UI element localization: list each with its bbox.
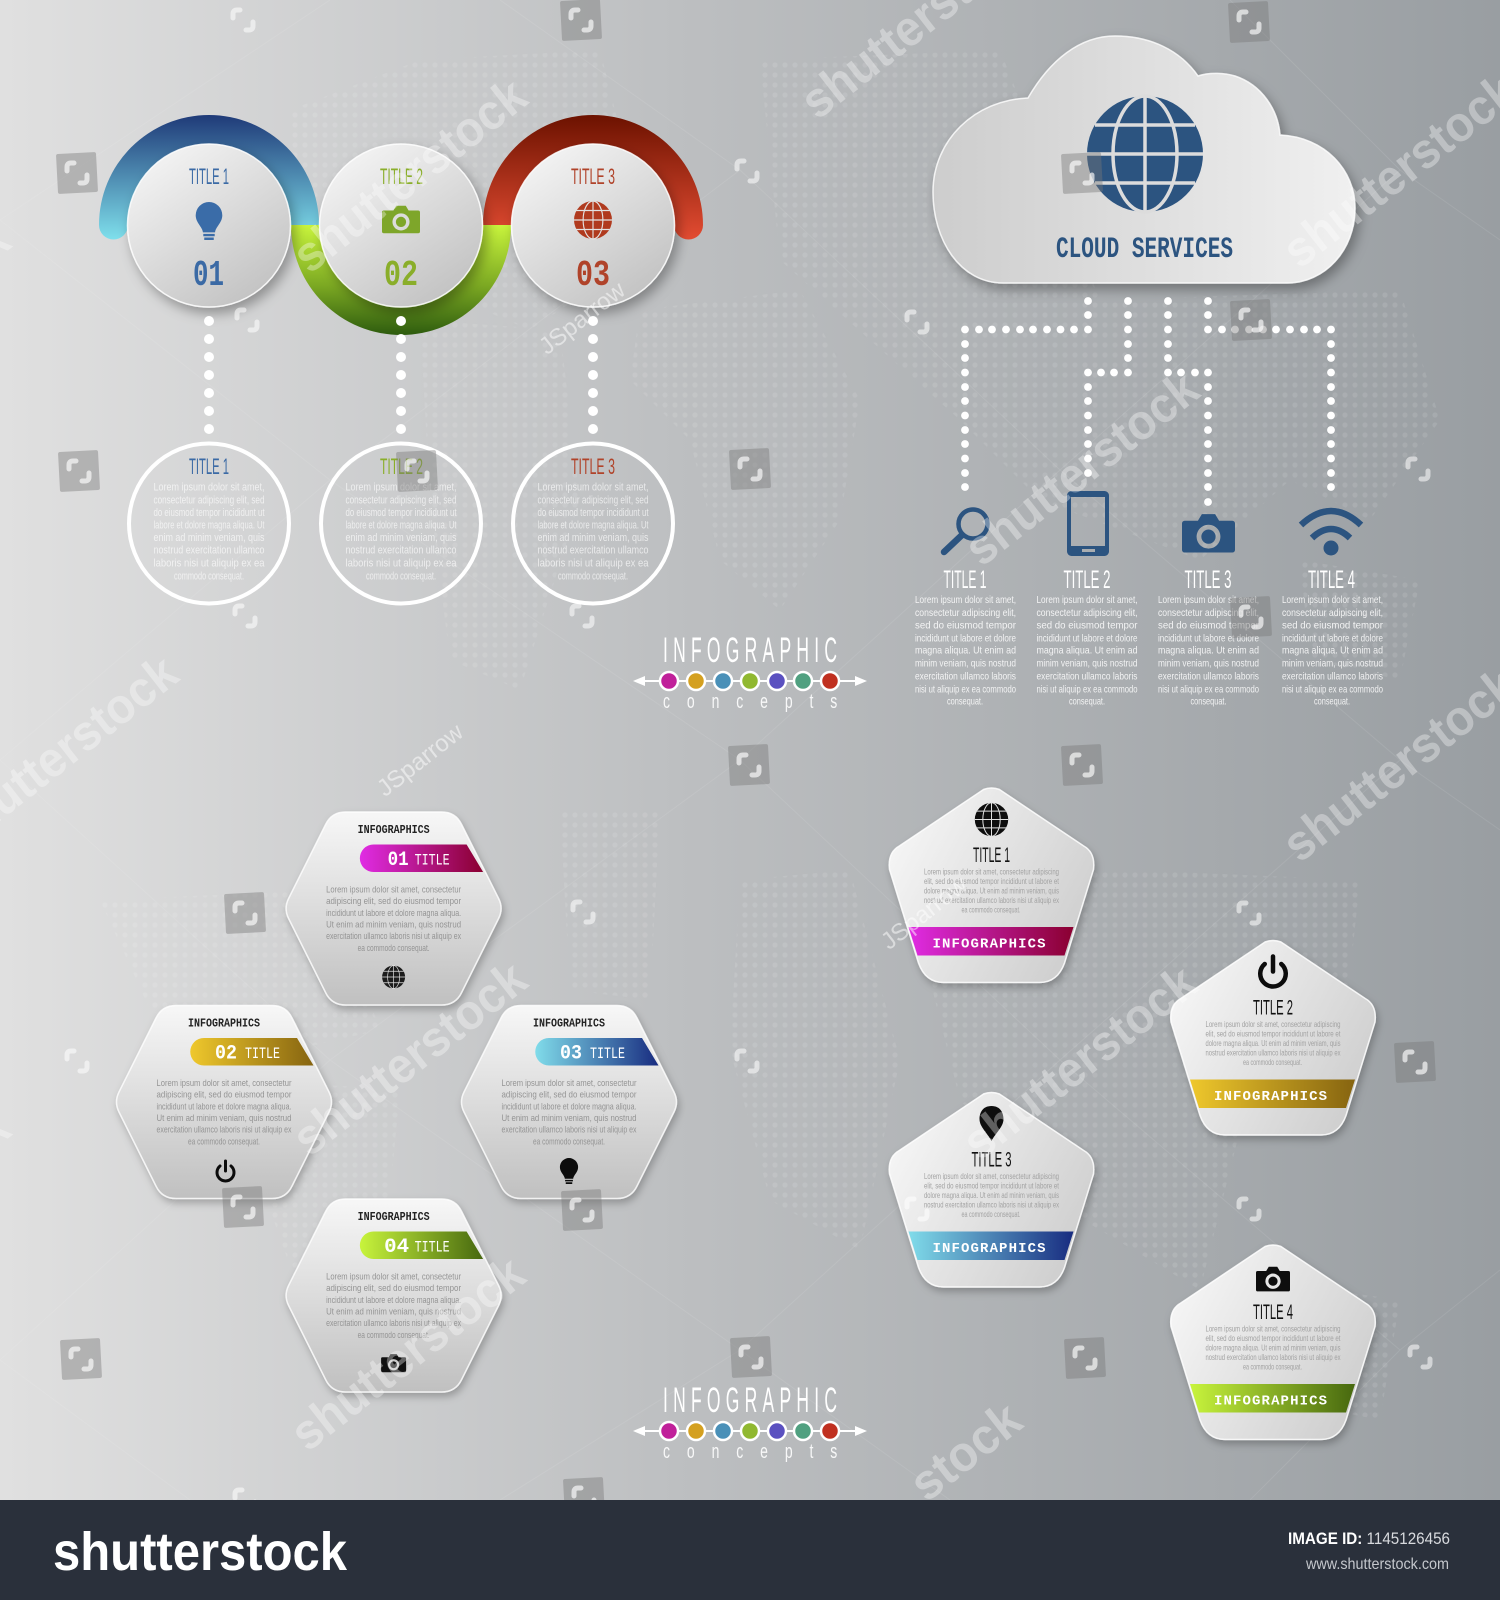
panel: pentagon 1: dolore magna aliqua. Ut enim ad minim veniam, quis [924, 886, 1059, 896]
column 1 text: TITLE 1 [944, 566, 986, 594]
circle 3: 03 [576, 255, 610, 296]
panel: pentagon 3: ea commodo consequat. [962, 1209, 1021, 1219]
blue arc [99, 115, 319, 240]
panel: pentagon 4: nostrud exercitation ullamco laboris nisi ut aliquip ex [1206, 1352, 1341, 1362]
panel: pentagon 1: ea commodo consequat. [962, 904, 1021, 914]
panel: pentagon 1: TITLE 1 [973, 844, 1010, 867]
column 1 text [915, 566, 1016, 708]
green arc [291, 225, 511, 335]
text ring 1: commodo consequat. [174, 570, 244, 582]
text ring 1: laboris nisi ut aliquip ex ea [154, 558, 265, 570]
panel: hexagon 04: exercitation ullamco laboris nisi ut aliquip ex [326, 1318, 461, 1329]
watermark layer: shutterstock [952, 954, 1207, 1170]
panel: hexagon 03: TITLE [590, 1045, 625, 1063]
column 1 text: exercitation ullamco laboris [915, 670, 1016, 682]
text ring 1: consectetur adipiscing elit, sed [154, 494, 264, 506]
panel: hexagon 03: incididunt ut labore et dolore magna aliqua. [502, 1102, 636, 1112]
panel: pentagon 3: Lorem ipsum dolor sit amet, consectetur adipiscing [924, 1171, 1059, 1181]
column 2 text: minim veniam, quis nostrud [1036, 658, 1138, 670]
text ring 3: nostrud exercitation ullamco [538, 544, 648, 556]
circle 1: TITLE 1 [189, 164, 229, 189]
panel: hexagon 04: INFOGRAPHICS [358, 1210, 430, 1224]
panel: pentagon 2: elit, sed do eiusmod tempor incididunt ut labore et [1206, 1028, 1341, 1038]
panel: hexagon 01: adipiscing elit, sed do eiusmod tempor [326, 896, 461, 907]
panel: pentagon 4: elit, sed do eiusmod tempor incididunt ut labore et [1206, 1333, 1341, 1343]
logo: infographic concepts, top [633, 630, 867, 713]
panel: hexagon 02: incididunt ut labore et dolore magna aliqua. [156, 1102, 292, 1112]
column 4 text: sed do eiusmod tempor [1282, 620, 1383, 632]
panel: hexagon 02 [116, 1006, 332, 1198]
panel: hexagon 04: adipiscing elit, sed do eiusmod tempor [326, 1283, 461, 1294]
panel: pentagon 3 [889, 1092, 1094, 1287]
column 4 text: minim veniam, quis nostrud [1282, 658, 1383, 670]
column 4 text: exercitation ullamco laboris [1282, 670, 1383, 682]
panel: hexagon 02: ea commodo consequat. [188, 1136, 260, 1148]
icon: camera [1182, 514, 1235, 553]
panel: pentagon 4 [1171, 1245, 1375, 1440]
cloud heading: CLOUD SERVICES [1056, 233, 1233, 267]
watermark layer: stock [899, 1391, 1032, 1512]
icon: magnifier [944, 510, 988, 552]
column 2 text: magna aliqua. Ut enim ad [1036, 644, 1138, 656]
text ring 1: TITLE 1 [189, 454, 229, 479]
panel: hexagon 04: Lorem ipsum dolor sit amet, consectetur [326, 1272, 461, 1282]
text ring 3: do eiusmod tempor incididunt ut [538, 507, 648, 519]
watermark layer: shutterstock [282, 67, 537, 283]
text ring 2: consectetur adipiscing elit, sed [346, 494, 456, 506]
text ring 3: TITLE 3 [571, 454, 615, 479]
text ring 3: Lorem ipsum dolor sit amet, [538, 482, 648, 494]
column 1 text: nisi ut aliquip ex ea commodo [915, 684, 1016, 696]
watermark layer: shutterstock [280, 1245, 535, 1461]
text ring 1: labore et dolore magna aliqua. Ut [154, 520, 264, 532]
watermark layer: JSparrow [372, 718, 469, 802]
column 1 text: Lorem ipsum dolor sit amet, [915, 594, 1016, 606]
text ring 3: labore et dolore magna aliqua. Ut [538, 520, 648, 532]
panel: pentagon 3: INFOGRAPHICS [932, 1241, 1046, 1257]
column 4 text: incididunt ut labore et dolore [1282, 632, 1383, 644]
panel: hexagon 03: 03 [560, 1042, 582, 1066]
logo: infographic concepts, top: concepts [663, 689, 837, 713]
panel: pentagon 3: nostrud exercitation ullamco laboris nisi ut aliquip ex [924, 1200, 1060, 1210]
circle 1 [128, 144, 290, 307]
watermark layer: JSparrow [876, 871, 973, 955]
text ring 2: Lorem ipsum dolor sit amet, [346, 482, 456, 494]
panel: pentagon 3: elit, sed do eiusmod tempor incididunt ut labore et [924, 1180, 1059, 1190]
panel: pentagon 3: TITLE 3 [972, 1148, 1012, 1172]
panel: hexagon 04: 04 [384, 1236, 409, 1259]
panel: three linked circles [99, 115, 703, 604]
panel: hexagon 01: incididunt ut labore et dolore magna aliqua. [326, 908, 461, 919]
footer image id: IMAGE ID: 1145126456 [1288, 1529, 1450, 1548]
column 4 text: TITLE 4 [1308, 566, 1355, 594]
circle 2: 02 [384, 255, 418, 296]
column 3 text: sed do eiusmod tempor [1158, 620, 1259, 632]
circle 3: TITLE 3 [571, 164, 615, 189]
panel: hexagon 03: Lorem ipsum dolor sit amet, consectetur [502, 1078, 636, 1089]
text ring 1: do eiusmod tempor incididunt ut [154, 507, 264, 519]
dotted connectors [204, 316, 598, 434]
watermark layer: shutterstock [954, 360, 1209, 576]
panel: hexagon 03: exercitation ullamco laboris nisi ut aliquip ex [502, 1124, 637, 1136]
column 2 text: consectetur adipiscing elit, [1036, 607, 1138, 619]
panel: pentagon 2: TITLE 2 [1253, 996, 1293, 1020]
panel: hexagon 01 [286, 812, 501, 1005]
text ring 3 [513, 444, 673, 604]
panel: pentagon 2: dolore magna aliqua. Ut enim ad minim veniam, quis [1206, 1038, 1340, 1048]
panel: hexagon 02: Ut enim ad minim veniam, quis nostrud [156, 1113, 292, 1124]
column 2 text: nisi ut aliquip ex ea commodo [1036, 684, 1138, 696]
text ring 1: nostrud exercitation ullamco [154, 544, 264, 556]
text ring 3: commodo consequat. [558, 570, 628, 582]
text ring 2: labore et dolore magna aliqua. Ut [346, 520, 456, 532]
column 2 text: sed do eiusmod tempor [1036, 620, 1138, 632]
column 1 text: magna aliqua. Ut enim ad [915, 644, 1016, 656]
panel: hexagon 04: incididunt ut labore et dolore magna aliqua. [326, 1295, 461, 1306]
panel: pentagon 1: INFOGRAPHICS [932, 936, 1046, 952]
column 2 text: TITLE 2 [1064, 566, 1110, 594]
panel: hexagon 03: INFOGRAPHICS [533, 1016, 605, 1030]
panel: hexagon 02: exercitation ullamco laboris nisi ut aliquip ex [156, 1124, 292, 1136]
panel: cloud services [915, 36, 1383, 708]
column 4 text: consectetur adipiscing elit, [1282, 607, 1383, 619]
panel: hexagon 03: ea commodo consequat. [533, 1136, 605, 1148]
panel: pentagon 4: Lorem ipsum dolor sit amet, consectetur adipiscing [1206, 1324, 1341, 1334]
panel: hexagon 01: ea commodo consequat. [358, 943, 430, 954]
footer bar [0, 1500, 1500, 1600]
text ring 1 [129, 444, 289, 604]
panel: hexagon 01: TITLE [415, 852, 450, 870]
panel: hexagon 02: adipiscing elit, sed do eiusmod tempor [156, 1090, 292, 1100]
logo: infographic concepts, bottom [633, 1380, 867, 1463]
column 3 text: Lorem ipsum dolor sit amet, [1158, 594, 1259, 606]
text ring 1: Lorem ipsum dolor sit amet, [154, 482, 264, 494]
panel: hexagon 01: Ut enim ad minim veniam, quis nostrud [326, 920, 461, 930]
column 2 text: incididunt ut labore et dolore [1036, 632, 1138, 644]
column 3 text: nisi ut aliquip ex ea commodo [1158, 684, 1259, 696]
panel: hexagon 01: exercitation ullamco laboris nisi ut aliquip ex [326, 931, 461, 942]
panel: pentagon 4: dolore magna aliqua. Ut enim ad minim veniam, quis [1206, 1342, 1340, 1352]
panel: pentagon 2 [1171, 940, 1375, 1135]
column 2 text: exercitation ullamco laboris [1036, 670, 1138, 682]
text ring 1: enim ad minim veniam, quis [154, 532, 265, 544]
column 4 text: magna aliqua. Ut enim ad [1282, 644, 1383, 656]
logo: infographic concepts, bottom: INFOGRAPHIC [663, 1380, 837, 1420]
icon: large globe [1087, 96, 1203, 212]
column 2 text [1036, 566, 1138, 708]
text ring 2 [321, 444, 481, 604]
panel: hexagon 04: TITLE [415, 1238, 450, 1256]
column 1 text: consequat. [947, 696, 983, 708]
panel: hexagon 01: INFOGRAPHICS [358, 823, 430, 837]
circle 2: TITLE 2 [380, 164, 423, 189]
dotted network lines [961, 297, 1335, 506]
column 3 text: exercitation ullamco laboris [1158, 670, 1259, 682]
circle 1: 01 [193, 255, 224, 296]
panel: hexagon 04: ea commodo consequat. [358, 1330, 430, 1341]
column 3 text [1158, 566, 1259, 708]
column 1 text: minim veniam, quis nostrud [915, 658, 1016, 670]
circle 3 [512, 144, 674, 307]
panel: hexagon 03: Ut enim ad minim veniam, quis nostrud [502, 1113, 636, 1124]
panel: pentagon 4: INFOGRAPHICS [1214, 1394, 1327, 1410]
panel: pentagon 4: TITLE 4 [1253, 1301, 1293, 1324]
panel: pentagon 2: nostrud exercitation ullamco laboris nisi ut aliquip ex [1206, 1048, 1341, 1058]
column 1 text: consectetur adipiscing elit, [915, 607, 1016, 619]
logo: infographic concepts, bottom: concepts [663, 1439, 837, 1463]
circle 2 [320, 144, 482, 307]
watermark layer: shutterstock [282, 950, 537, 1166]
text ring 3: enim ad minim veniam, quis [538, 532, 649, 544]
panel: hexagon 04 [286, 1199, 501, 1392]
panel: hexagon 02: INFOGRAPHICS [188, 1016, 260, 1030]
text ring 2: enim ad minim veniam, quis [346, 532, 457, 544]
panel: pentagon 2: INFOGRAPHICS [1214, 1089, 1327, 1105]
footer logo: shutterstock [53, 1522, 348, 1582]
column 4 text [1282, 566, 1383, 708]
text ring 2: laboris nisi ut aliquip ex ea [346, 558, 457, 570]
panel: hexagon 03 [462, 1006, 676, 1198]
panel: hexagon 03: adipiscing elit, sed do eiusmod tempor [502, 1090, 636, 1100]
column 2 text: consequat. [1069, 696, 1105, 708]
text ring 3: consectetur adipiscing elit, sed [538, 494, 648, 506]
panel: hexagon 01: 01 [388, 849, 409, 872]
text ring 2: TITLE 2 [380, 454, 423, 479]
icon: tablet [1069, 493, 1107, 555]
column 4 text: nisi ut aliquip ex ea commodo [1282, 684, 1383, 696]
column 4 text: consequat. [1314, 696, 1350, 708]
panel: pentagon 3: dolore magna aliqua. Ut enim ad minim veniam, quis [924, 1190, 1059, 1200]
column 3 text: consequat. [1190, 696, 1226, 708]
panel: pentagon 2: ea commodo consequat. [1243, 1057, 1302, 1067]
panel: pentagon 1: nostrud exercitation ullamco laboris nisi ut aliquip ex [924, 895, 1060, 905]
panel: pentagon 1: Lorem ipsum dolor sit amet, consectetur adipiscing [924, 866, 1059, 876]
column 2 text: Lorem ipsum dolor sit amet, [1036, 594, 1138, 606]
text ring 2: do eiusmod tempor incididunt ut [346, 507, 456, 519]
text ring 2: commodo consequat. [366, 570, 436, 582]
panel: hexagon 01: Lorem ipsum dolor sit amet, consectetur [326, 884, 461, 896]
column 3 text: minim veniam, quis nostrud [1158, 658, 1259, 670]
column 4 text: Lorem ipsum dolor sit amet, [1282, 594, 1383, 606]
panel: hexagon 04: Ut enim ad minim veniam, quis nostrud [326, 1306, 461, 1318]
column 3 text: consectetur adipiscing elit, [1158, 607, 1259, 619]
column 3 text: incididunt ut labore et dolore [1158, 632, 1259, 644]
column 3 text: magna aliqua. Ut enim ad [1158, 644, 1259, 656]
watermark layer: JSparrow [534, 276, 631, 360]
footer url: www.shutterstock.com [1305, 1556, 1449, 1573]
cloud shape [933, 36, 1355, 283]
column 3 text: TITLE 3 [1184, 566, 1232, 594]
column 1 text: sed do eiusmod tempor [915, 620, 1016, 632]
panel: hexagon 02: TITLE [245, 1045, 280, 1063]
red arc [483, 115, 703, 240]
icon: wifi [1301, 511, 1361, 556]
logo: infographic concepts, top: INFOGRAPHIC [663, 630, 837, 670]
panel: pentagon 2: Lorem ipsum dolor sit amet, consectetur adipiscing [1206, 1019, 1341, 1029]
column 1 text: incididunt ut labore et dolore [915, 632, 1016, 644]
panel: pentagon 1: elit, sed do eiusmod tempor incididunt ut labore et [924, 876, 1059, 886]
panel: pentagon 4: ea commodo consequat. [1243, 1362, 1302, 1372]
panel: pentagon 1 [889, 788, 1094, 982]
text ring 2: nostrud exercitation ullamco [346, 544, 456, 556]
panel: hexagon 02: 02 [215, 1042, 237, 1066]
panel: hexagon 02: Lorem ipsum dolor sit amet, consectetur [156, 1078, 292, 1089]
text ring 3: laboris nisi ut aliquip ex ea [538, 558, 649, 570]
